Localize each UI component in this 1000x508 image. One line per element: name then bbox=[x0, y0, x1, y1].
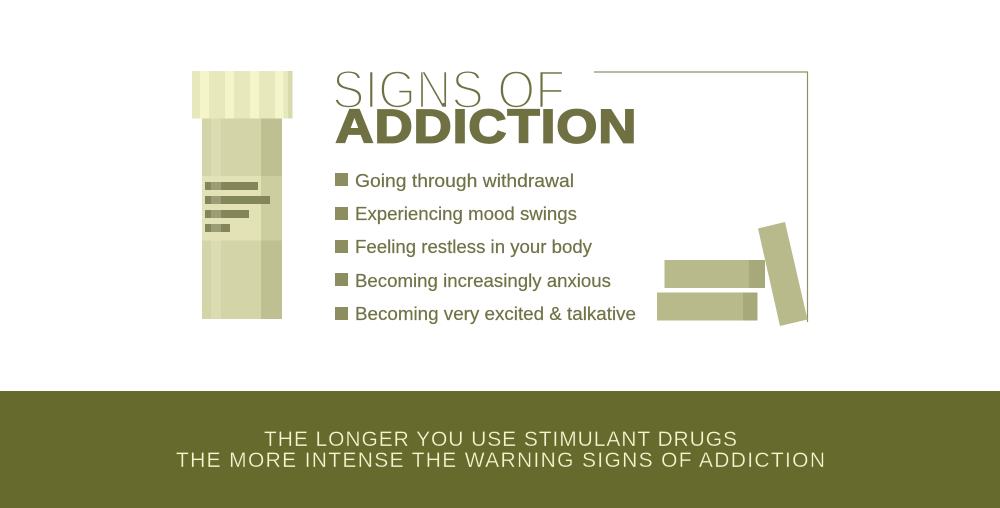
list item 5: Becoming very excited & talkative bbox=[355, 304, 636, 324]
banner text line 2: THE MORE INTENSE THE WARNING SIGNS OF ADDICTION bbox=[176, 449, 825, 472]
upper book bbox=[664, 260, 765, 288]
list item 2: Experiencing mood swings bbox=[355, 204, 577, 224]
heading line: addiction: ADDICTION bbox=[336, 100, 638, 152]
heading bbox=[332, 60, 638, 152]
leaning book bbox=[758, 222, 808, 326]
heading line: signs of: SIGNS OF bbox=[332, 60, 565, 120]
list: warning signs bbox=[335, 171, 636, 324]
bottle cap bbox=[192, 71, 292, 118]
list item 4: Becoming increasingly anxious bbox=[355, 271, 611, 291]
bottle label bbox=[202, 176, 282, 240]
frame line bbox=[594, 72, 808, 322]
lower book bbox=[657, 292, 758, 320]
icon: pill bottle bbox=[192, 71, 292, 319]
list item 3: Feeling restless in your body bbox=[355, 237, 592, 257]
list item 1: Going through withdrawal bbox=[355, 171, 574, 191]
icon: stacked books bbox=[657, 222, 808, 326]
banner bbox=[0, 391, 1000, 508]
banner text line 1: THE LONGER YOU USE STIMULANT DRUGS bbox=[264, 428, 737, 451]
bottle body bbox=[202, 118, 282, 319]
